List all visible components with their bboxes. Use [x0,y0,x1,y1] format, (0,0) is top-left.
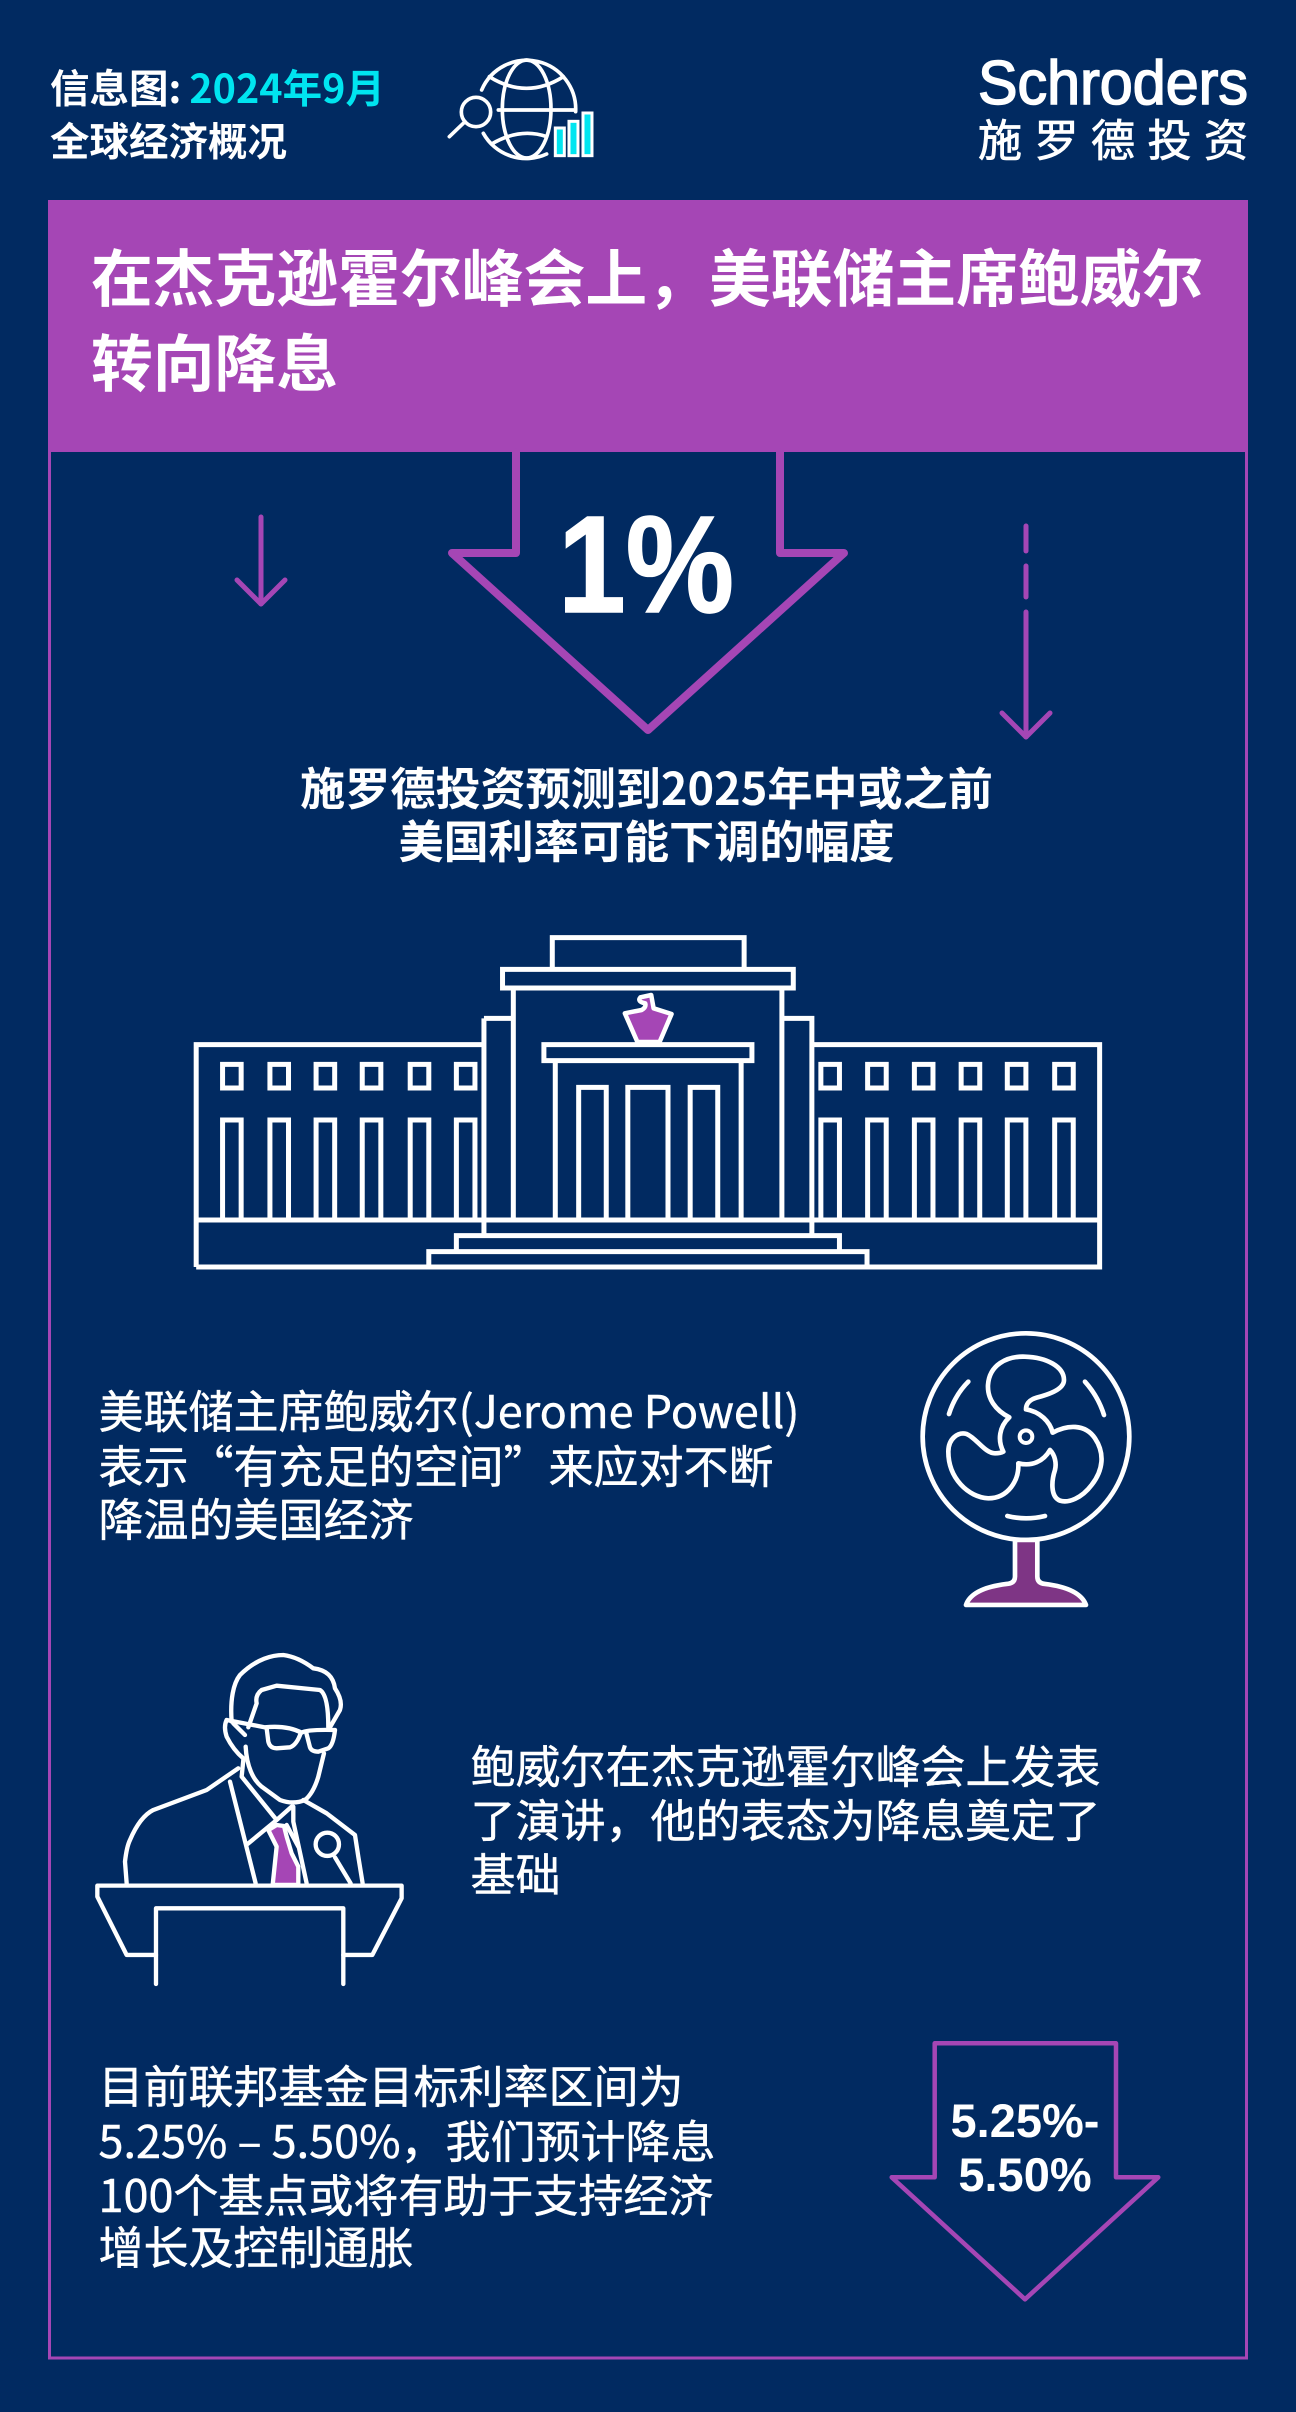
icon: federal reserve building [196,938,1100,1267]
subheading: 美国利率可能下调的幅度 [398,806,895,871]
arrow: dashed right [1002,526,1050,737]
icon: speaker at podium [97,1655,402,1984]
text block: speech: 基础 [470,1839,561,1904]
arrow: large with 1%: 1% [558,488,734,642]
text block: speech [470,1731,1101,1904]
text block: Powell statement [98,1376,800,1549]
text block: Powell statement: 美联储主席鲍威尔(Jerome Powell) [98,1376,800,1441]
content frame [50,300,1246,2358]
logo: Schroders: Schroders [978,49,1248,118]
text block: rate outlook: 100个基点或将有助于支持经济 [98,2160,713,2225]
text block: rate outlook: 增长及控制通胀 [98,2212,414,2277]
header text [50,58,385,168]
text block: rate outlook [98,2051,716,2277]
arrow: large with 1% [452,452,844,730]
icon: globe with magnifier and bars [449,60,592,158]
title banner: 在杰克逊霍尔峰会上，美联储主席鲍威尔 [91,229,1203,319]
logo: Schroders: 施罗德投资 [978,105,1260,169]
title banner: 转向降息 [91,314,338,404]
icon: fan [923,1333,1129,1605]
text block: speech: 了演讲，他的表态为降息奠定了 [470,1785,1101,1850]
text block: Powell statement: 降温的美国经济 [98,1484,414,1549]
text block: rate outlook: 目前联邦基金目标利率区间为 [98,2051,684,2116]
text block: Powell statement: 表示“有充足的空间”来应对不断 [98,1431,774,1496]
subheading [300,753,993,871]
arrow: small left [237,517,285,604]
arrow: rate range: 5.25%- [951,2094,1099,2147]
text block: speech: 鲍威尔在杰克逊霍尔峰会上发表 [470,1731,1101,1796]
subheading: 施罗德投资预测到2025年中或之前 [300,753,993,818]
header text: 信息图:2024年9月 [50,58,385,115]
arrow: rate range [892,2043,1158,2299]
header text: 全球经济概况 [50,111,287,168]
title banner [48,200,1248,452]
arrow: rate range: 5.50% [958,2148,1092,2201]
text block: rate outlook: 5.25% – 5.50%，我们预计降息 [98,2106,716,2171]
logo: Schroders [978,49,1260,169]
